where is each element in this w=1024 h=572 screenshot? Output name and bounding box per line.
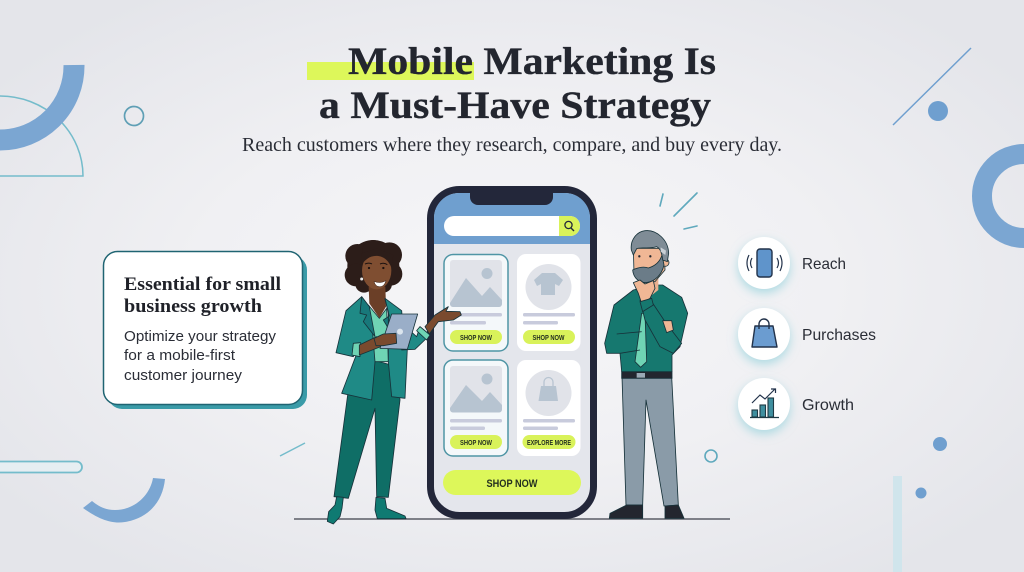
panel heading: Essential for small [124,274,281,295]
benefit: reach [738,237,846,289]
label: purchases: Purchases [802,327,876,344]
icon: rising bar chart [738,378,790,430]
phone notch [470,191,553,205]
title highlight [307,62,474,80]
panel body text: customer journey [124,367,242,384]
main shop now button [443,470,581,495]
panel body text: for a mobile-first [124,347,236,364]
panel: essential for small business growth [104,252,307,409]
illustration: thinking man [605,231,688,518]
phone header [434,193,590,244]
title [319,40,716,127]
label: growth: Growth [802,397,854,414]
icon: phone with signal waves [738,237,790,289]
benefit: purchases [738,308,876,360]
panel heading: business growth [124,296,262,317]
subtitle: Reach customers where they research, compare, and buy every day. [242,134,782,156]
product card 4: EXPLORE MORE [527,438,571,447]
title: a Must-Have Strategy [319,84,712,127]
product card 1 [444,254,508,351]
decorative shapes: bottom right [705,437,947,572]
product card 1: SHOP NOW [460,333,493,342]
benefit: growth [738,378,854,430]
panel body text: Optimize your strategy [124,328,276,345]
product card 3: SHOP NOW [460,438,493,447]
decorative shapes: top left [0,65,144,176]
illustration: woman with tablet [327,240,461,524]
thought spark lines [660,193,697,229]
icon: shopping bag [738,308,790,360]
product card 2 [517,254,580,351]
product card 4 [517,360,580,456]
decorative shapes: top right [893,48,1024,238]
phone [430,190,594,516]
panel body text [124,328,276,384]
title: Mobile Marketing Is [348,40,716,83]
search bar [444,216,580,236]
decorative shapes: bottom left [0,443,305,522]
ground line [294,518,730,520]
label: reach: Reach [802,256,846,273]
product card 3 [444,360,508,456]
product card 2: SHOP NOW [532,333,565,342]
main shop now button: SHOP NOW [486,478,538,490]
panel heading [124,274,281,317]
